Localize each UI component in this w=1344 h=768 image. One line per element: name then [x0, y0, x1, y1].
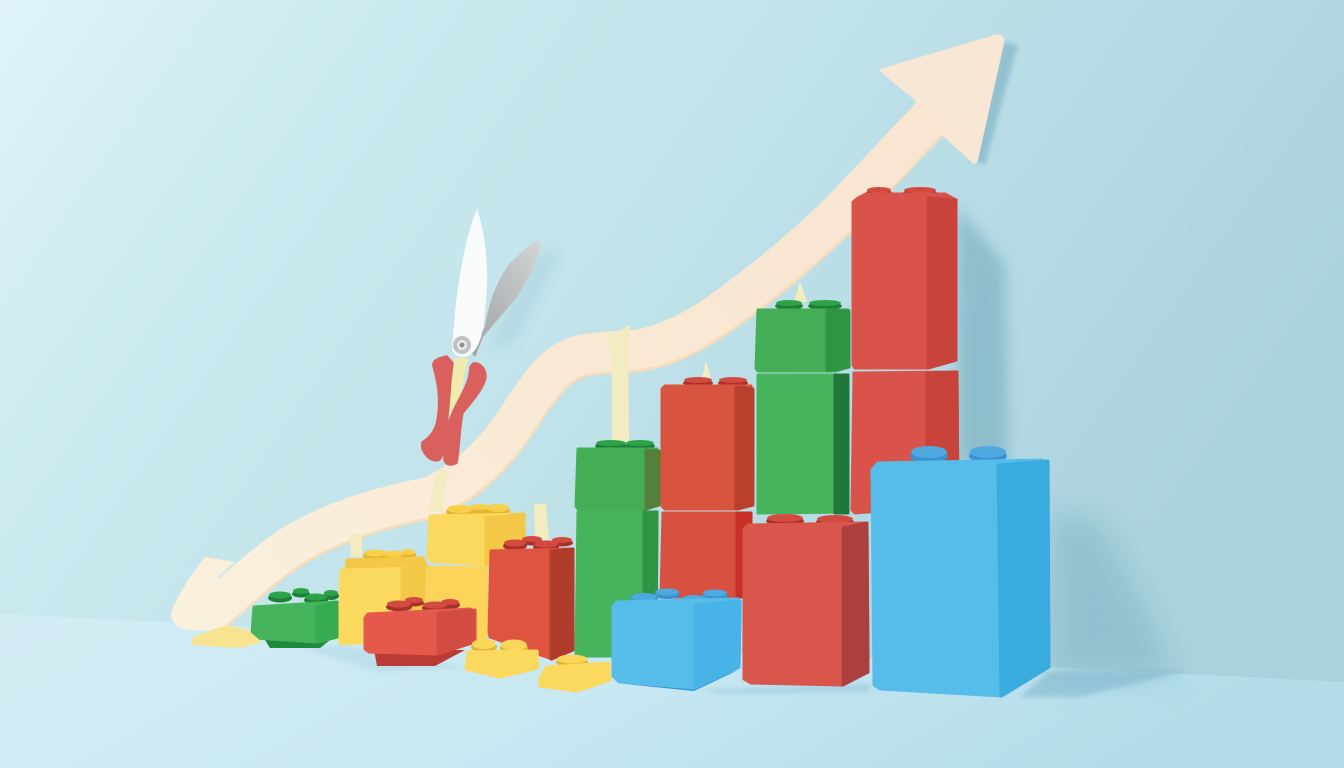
upper yellow block: [428, 514, 524, 565]
upper green block: [576, 449, 659, 509]
studs: [268, 590, 339, 604]
yellow small piece one: [466, 639, 538, 677]
stack: red tower right: [852, 187, 958, 513]
red big block: [744, 514, 868, 685]
stack: green left tower: [576, 440, 659, 656]
body: [613, 599, 740, 688]
arrow head: [880, 36, 1003, 162]
studs: [386, 600, 460, 612]
body: [466, 651, 538, 677]
body: [365, 609, 475, 654]
scissor blade: grey: [470, 241, 540, 357]
studs: [775, 302, 842, 310]
studs: [683, 379, 748, 387]
upper red block: [662, 386, 753, 509]
body: [540, 663, 610, 691]
studs: [363, 551, 416, 562]
scissor handle: right: [444, 363, 486, 465]
yellow string in handles: [447, 358, 468, 418]
scissor blade: white: [452, 209, 487, 357]
blue small block: [613, 588, 740, 691]
scissors: [422, 209, 540, 465]
floor shadows: [300, 645, 1190, 697]
yellow small piece two: [540, 654, 610, 691]
upper green block: [756, 310, 849, 371]
arrow: rising trend line: [171, 36, 1003, 631]
studs: [766, 516, 854, 527]
base: [265, 636, 335, 648]
pivot: [453, 336, 471, 354]
body: [744, 523, 868, 685]
lower yellow block: [424, 567, 487, 639]
scissor handle: left: [422, 356, 453, 461]
studs: [910, 449, 1007, 463]
floor: [0, 614, 1344, 768]
yellow stack: [424, 504, 524, 639]
wall shadows: [490, 42, 1175, 675]
studs: [446, 506, 510, 517]
studs: [630, 591, 728, 607]
flat yellow piece: [192, 625, 262, 648]
blue big block: [872, 446, 1049, 696]
base: [374, 650, 465, 666]
body: [872, 460, 1049, 696]
body: [489, 549, 573, 659]
studs: [471, 642, 528, 654]
studs: [866, 189, 937, 197]
body: [252, 602, 337, 642]
stack: red middle tower: [661, 377, 753, 597]
lower red block: [852, 372, 958, 513]
lower green block: [758, 375, 848, 513]
support strings: [350, 281, 807, 557]
lower red block: [661, 513, 751, 597]
arrow body under-edge: [206, 118, 933, 620]
stack: green tower: [756, 300, 849, 513]
studs: [503, 538, 573, 552]
studs: [595, 442, 655, 450]
green small block: [252, 588, 339, 648]
arrow tail: [171, 557, 260, 631]
red tall block: [489, 536, 573, 659]
base: [625, 670, 738, 691]
yellow plate block: [339, 549, 426, 644]
body: [339, 568, 424, 644]
red small block: [365, 597, 475, 666]
studs: [556, 657, 588, 667]
arrow body: [205, 115, 932, 617]
lower green block: [576, 512, 657, 656]
upper red block: [853, 194, 956, 368]
top plate: [346, 558, 426, 569]
